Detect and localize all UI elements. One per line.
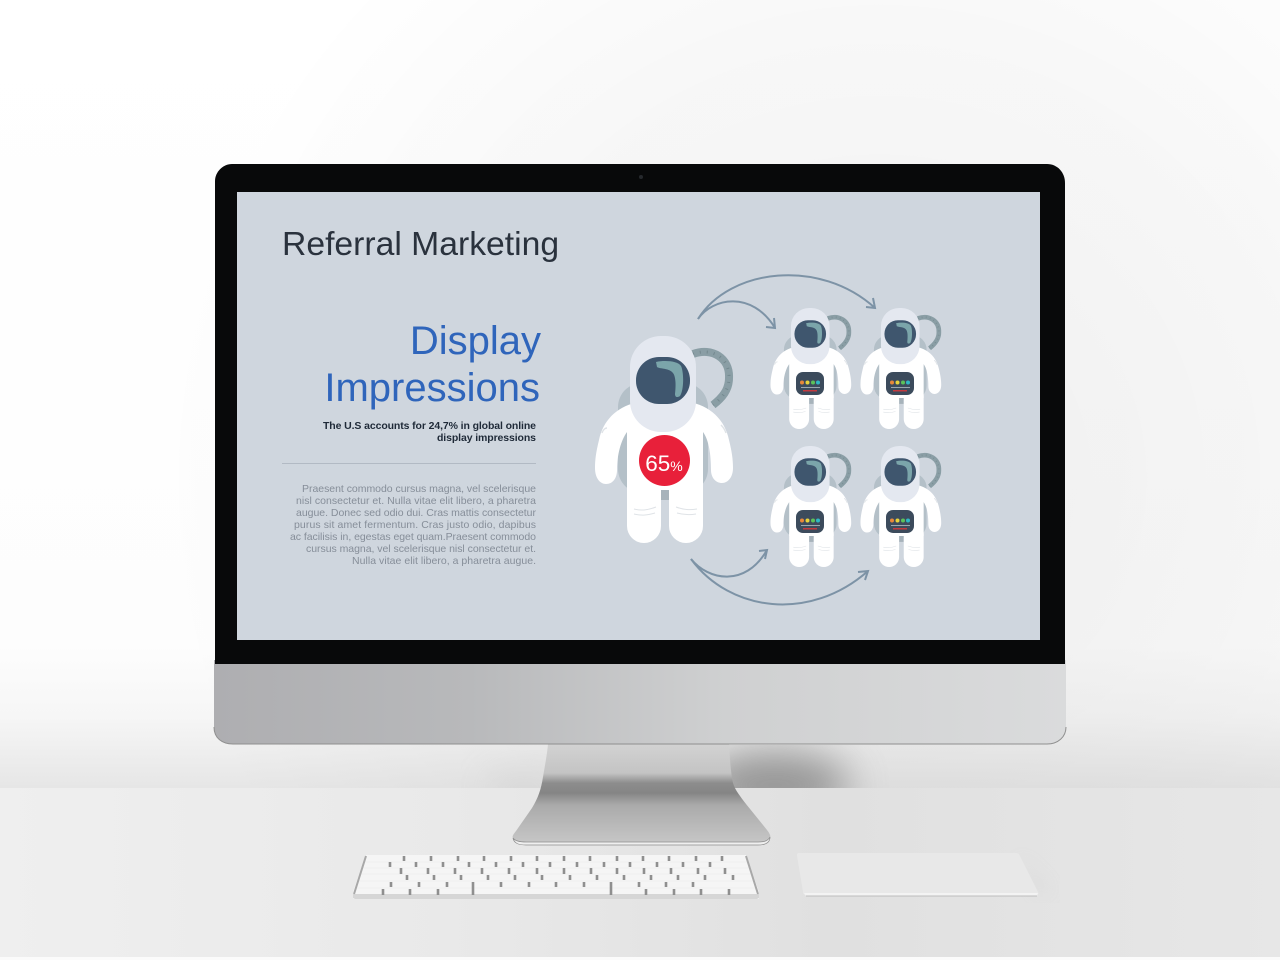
monitor shadow on wall — [729, 745, 866, 788]
monitor chin — [214, 660, 1066, 744]
stat badge: 65%: 65% — [645, 451, 683, 476]
arrow: bottom short — [691, 550, 767, 577]
icon: small astronaut top right — [860, 308, 941, 429]
heading: Display Impressions: Display — [410, 319, 541, 363]
trackpad — [797, 853, 1050, 896]
body paragraph: cursus magna, vel scelerisque nisl consectetur et. — [306, 543, 536, 555]
subheading: The U.S accounts for 24,7% in global online — [323, 420, 536, 432]
body paragraph: ac facilisis in, egestas eget quam.Praesent commodo — [290, 531, 536, 543]
keyboard — [353, 855, 759, 899]
icon: small astronaut top left — [770, 308, 851, 429]
desk surface — [0, 788, 1280, 957]
monitor — [214, 164, 1066, 744]
body paragraph: Praesent commodo cursus magna, vel scelerisque — [302, 483, 536, 495]
icon: small astronaut bottom right — [860, 446, 941, 567]
slide screen — [237, 192, 1040, 640]
divider — [282, 463, 536, 464]
icon: large astronaut — [595, 336, 733, 543]
arrow: bottom long — [691, 559, 868, 604]
title: Referral Marketing — [282, 225, 559, 263]
arrow: top short — [698, 301, 775, 328]
body paragraph: Nulla vitae elit libero, a pharetra augue. — [352, 555, 536, 567]
heading: Display Impressions: Impressions — [324, 366, 540, 410]
subheading: display impressions — [437, 432, 536, 444]
heading: Display Impressions — [324, 319, 541, 410]
arrow: top long — [698, 275, 875, 319]
body paragraph: augue. Donec sed odio dui. Cras mattis consectetur — [296, 507, 536, 519]
subheading — [323, 420, 536, 444]
body paragraph: purus sit amet fermentum. Cras justo odio, dapibus — [294, 519, 536, 531]
monitor stand — [513, 744, 770, 845]
stat badge: 65% — [639, 435, 690, 486]
bottom image edge — [0, 957, 1280, 960]
webcam — [639, 175, 643, 179]
monitor bezel — [215, 164, 1065, 664]
icon: small astronaut bottom left — [770, 446, 851, 567]
body paragraph: nisl consectetur et. Nulla vitae elit libero, a pharetra — [296, 495, 536, 507]
body paragraph — [290, 483, 536, 567]
